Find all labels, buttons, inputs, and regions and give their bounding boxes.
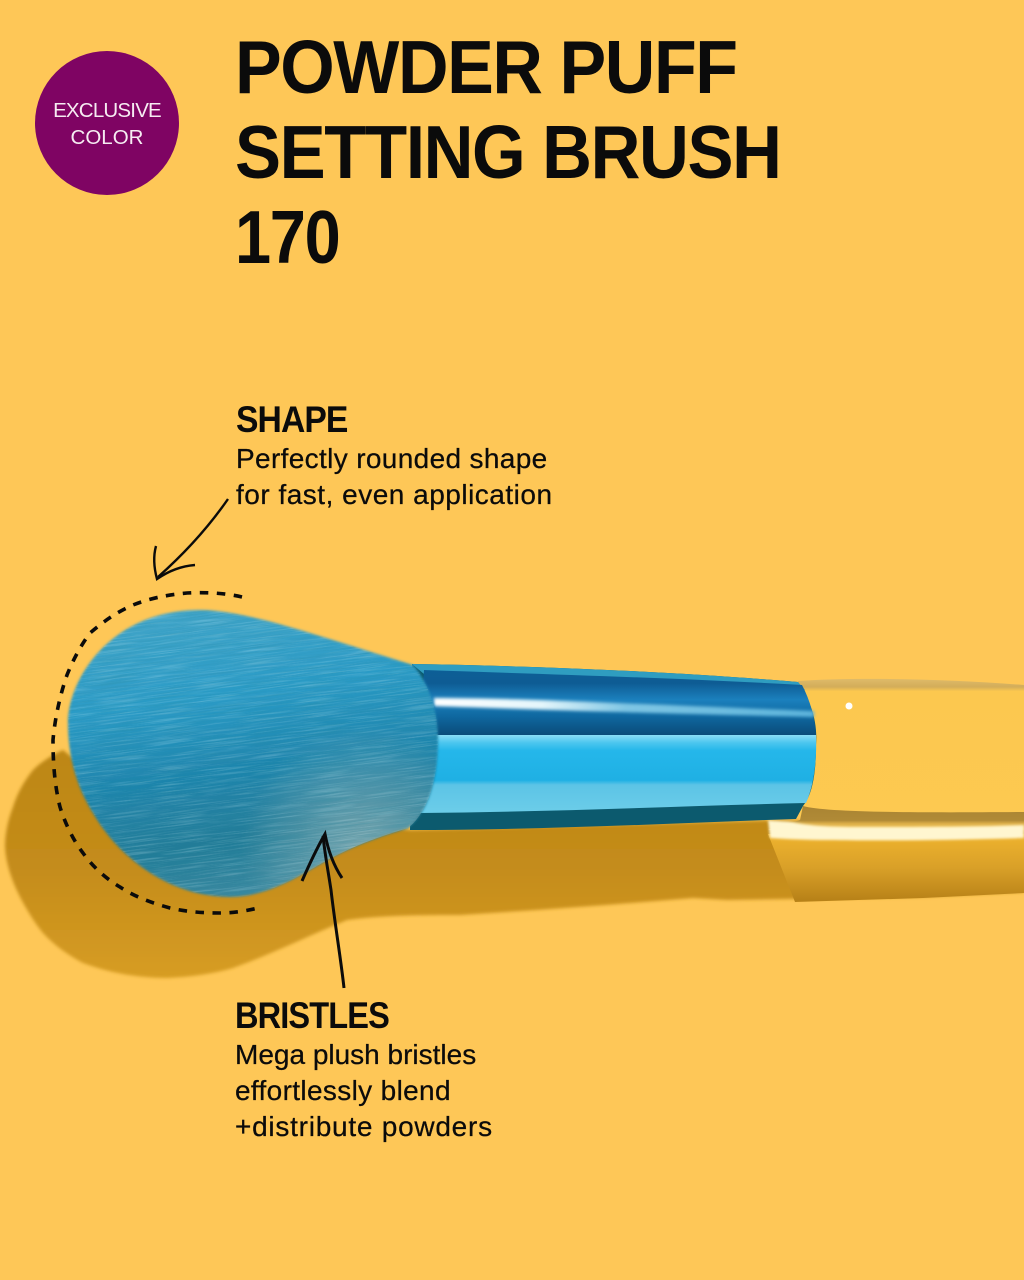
- callout: bristles: [235, 995, 493, 1142]
- badge: exclusive color: EXCLUSIVE: [53, 99, 161, 122]
- ferrule navy band: [420, 670, 816, 735]
- callout: bristles: +distribute powders: [235, 1111, 493, 1142]
- handle: [768, 679, 1024, 902]
- shadow: [5, 750, 1024, 978]
- handle highlight: [768, 820, 1024, 840]
- title: POWDER PUFF: [235, 25, 737, 109]
- handle caustic wedge: [768, 834, 1024, 902]
- callout: shape: SHAPE: [236, 399, 347, 440]
- handle lower band: [768, 806, 1024, 830]
- arrow: shape: [154, 499, 228, 579]
- dashed circle: [53, 593, 258, 913]
- callout: bristles: Mega plush bristles: [235, 1039, 476, 1070]
- badge: exclusive color: COLOR: [71, 126, 143, 149]
- callout: shape: [236, 399, 553, 510]
- ferrule top edge: [412, 664, 805, 690]
- title: 170: [235, 195, 339, 279]
- ferrule: [410, 664, 816, 830]
- callout: shape: for fast, even application: [236, 479, 553, 510]
- bristles: [66, 608, 440, 899]
- callout: bristles: effortlessly blend: [235, 1075, 451, 1106]
- handle glint: [846, 702, 852, 710]
- arrow: bristles: [302, 834, 344, 988]
- title: [235, 25, 781, 279]
- title: SETTING BRUSH: [235, 110, 781, 194]
- callout: shape: Perfectly rounded shape: [236, 443, 548, 474]
- badge: exclusive color: [35, 51, 179, 195]
- brush photo illustration: [3, 498, 1024, 988]
- ferrule bright band: [420, 735, 816, 813]
- callout: bristles: BRISTLES: [235, 995, 389, 1036]
- ferrule streak: [434, 698, 814, 717]
